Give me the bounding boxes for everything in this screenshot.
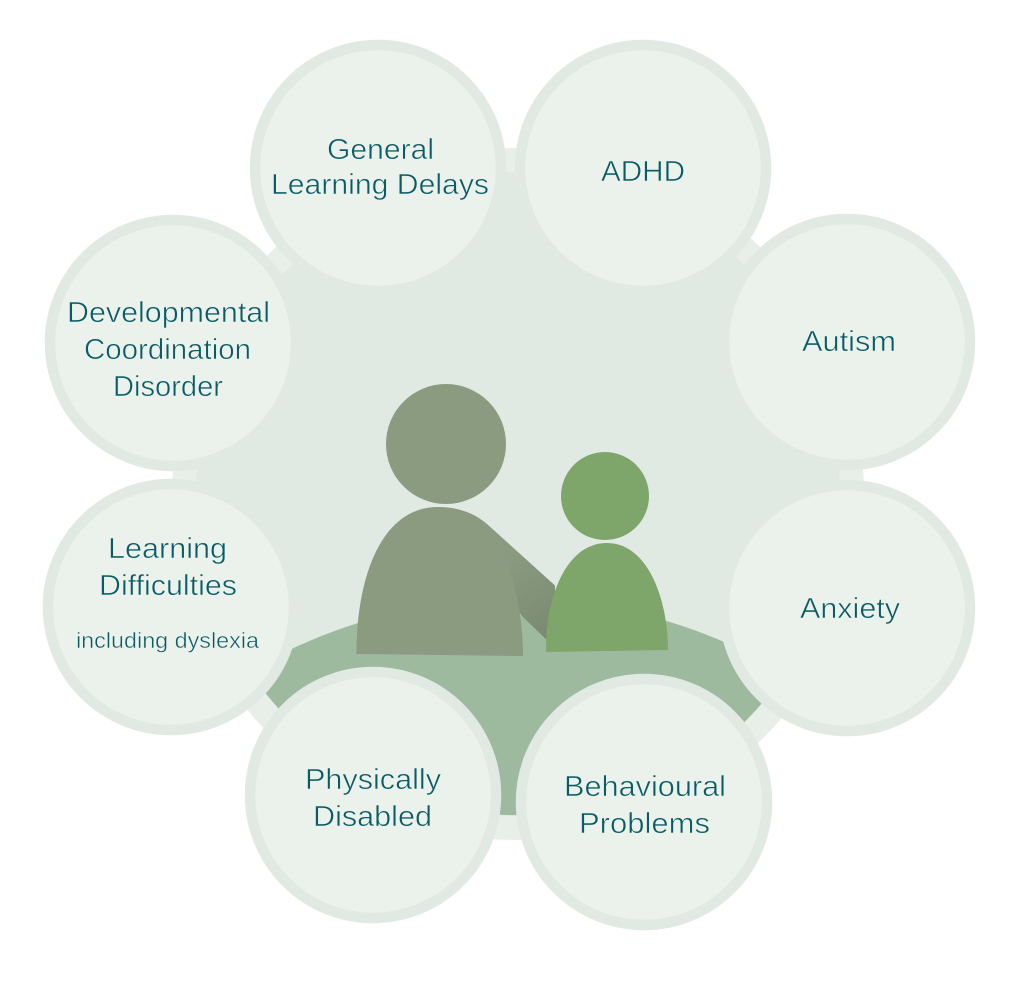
panel: Physically Disabled: Physically xyxy=(305,764,442,796)
panel: Anxiety: Anxiety xyxy=(800,593,901,625)
panel: ADHD xyxy=(520,45,766,291)
panel: Autism xyxy=(724,219,970,465)
panel: General Learning Delays: Learning Delays xyxy=(271,169,489,201)
panel: General Learning Delays: General xyxy=(327,134,434,166)
panel: Autism: Autism xyxy=(802,326,896,358)
panel: Developmental Coordination Disorder: Coordination xyxy=(84,334,251,366)
panel: Developmental Coordination Disorder: Developmental xyxy=(67,297,270,329)
panel: Learning Difficulties: including dyslexia xyxy=(76,628,260,653)
panel: Behavioural Problems: Behavioural xyxy=(564,771,726,803)
panel: General Learning Delays xyxy=(255,45,501,291)
green ground segment xyxy=(250,599,785,815)
icon: adult figure xyxy=(356,384,555,656)
panel: Anxiety xyxy=(724,485,970,731)
central background circle xyxy=(172,148,864,840)
panel: ADHD: ADHD xyxy=(601,156,685,188)
panel: Learning Difficulties xyxy=(48,484,294,730)
panel: Developmental Coordination Disorder xyxy=(50,220,296,466)
panel: Physically Disabled xyxy=(250,672,496,918)
panel: Learning Difficulties: Difficulties xyxy=(99,570,237,602)
icon: child figure xyxy=(546,452,668,652)
panel: Developmental Coordination Disorder: Disorder xyxy=(113,371,223,403)
panel: Behavioural Problems: Problems xyxy=(579,808,710,840)
panel: Learning Difficulties: Learning xyxy=(108,533,227,565)
panel: Behavioural Problems xyxy=(521,679,767,925)
panel: Physically Disabled: Disabled xyxy=(313,801,432,833)
